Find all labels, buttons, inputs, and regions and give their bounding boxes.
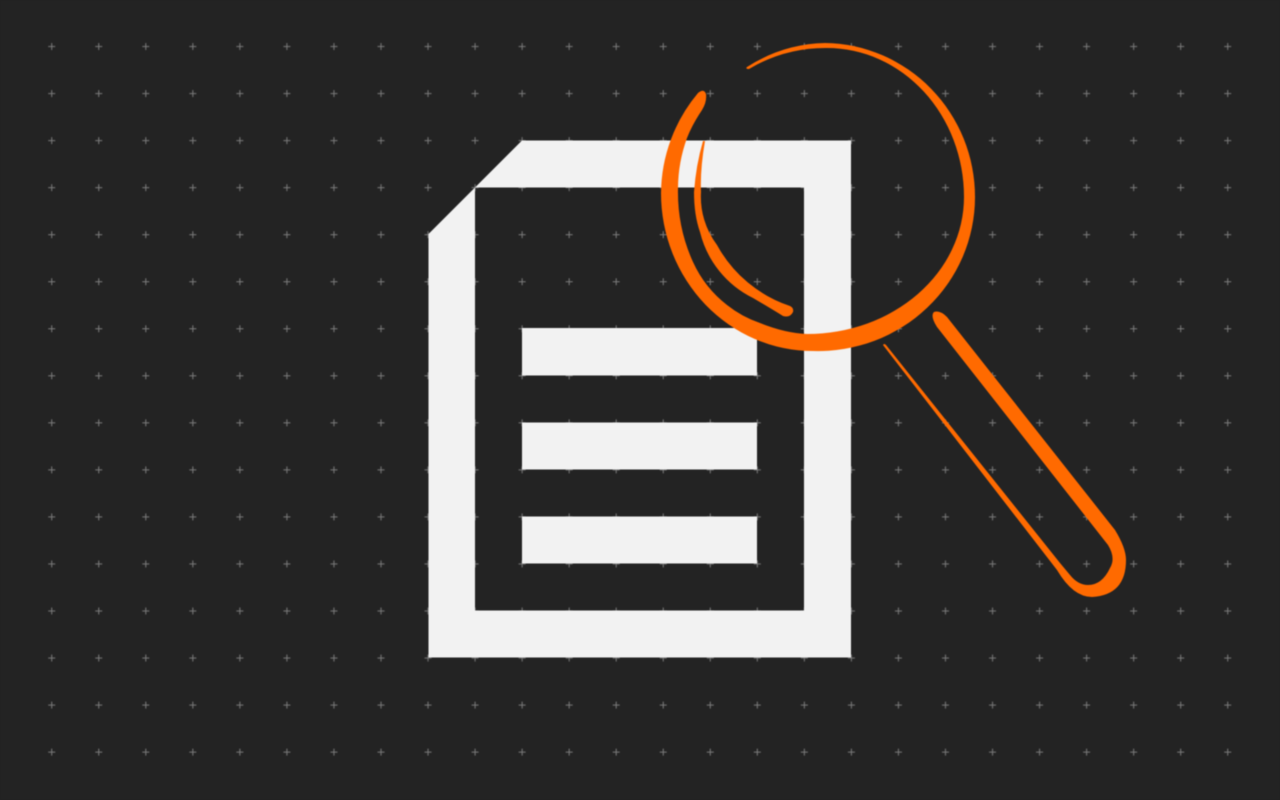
text line 1 [522, 328, 757, 376]
text line 2 [522, 422, 757, 470]
lens ring [661, 43, 975, 351]
handle [883, 312, 1126, 597]
icon: document [428, 140, 851, 658]
document page outline [428, 140, 851, 658]
icon: magnifying glass [661, 43, 1126, 597]
text line 3 [522, 516, 757, 564]
lens highlight [694, 141, 793, 316]
